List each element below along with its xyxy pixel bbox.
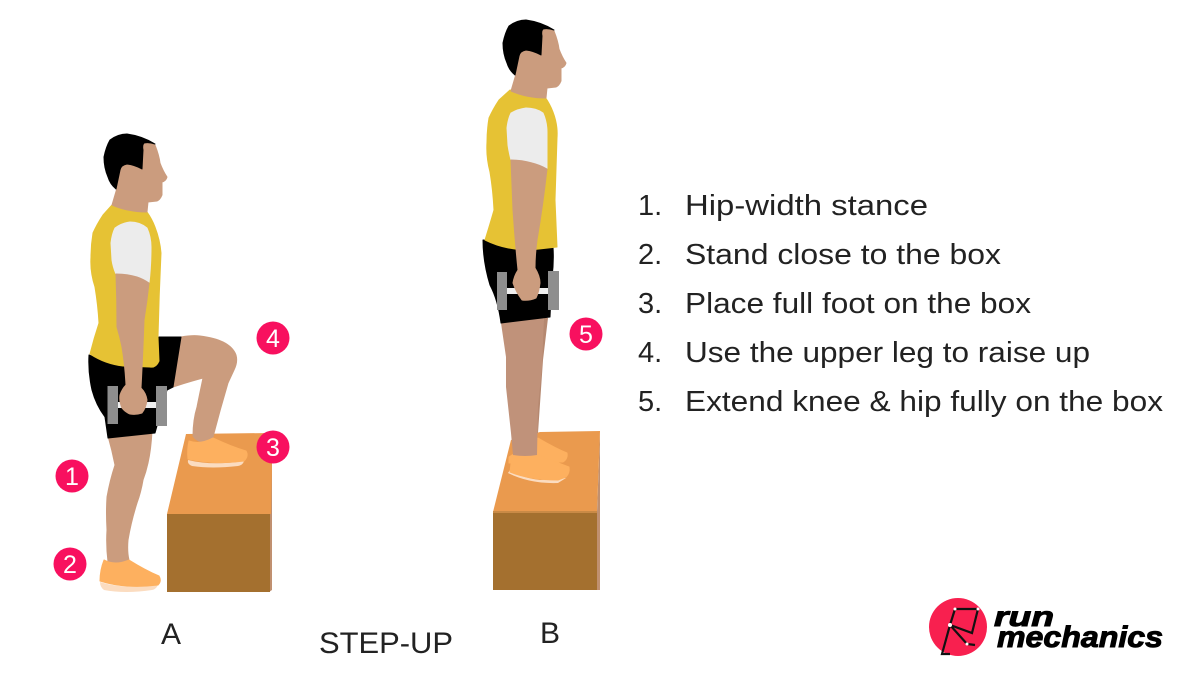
logo wordmark: mechanics [997,621,1163,654]
shorts B [483,240,553,323]
shoes B [508,438,569,483]
marker 1 [56,460,88,492]
shorts A [89,337,181,438]
step 2: 2. [638,239,662,271]
shirt B [485,90,557,250]
marker 1: 1 [65,463,79,491]
step 4: 4. [638,337,662,369]
head B [503,20,566,98]
step 4: Use the upper leg to raise up [685,337,1090,369]
sleeve A [111,222,151,283]
raised leg [173,336,237,442]
step 5: 5. [638,386,662,418]
shirt A [90,205,161,367]
arm B [511,160,547,300]
front leg B [501,317,544,456]
figure A: person stepping up onto box [89,134,272,592]
standing leg [106,431,152,564]
marker 4 [256,322,290,354]
marker 2: 2 [63,551,77,579]
step 3: 3. [638,288,662,320]
title: STEP-UP: STEP-UP [319,627,453,660]
dumbbell B [497,271,559,310]
box A [167,433,272,592]
marker 4: 4 [266,325,280,353]
marker 2 [54,548,86,580]
back leg B [530,317,548,433]
box B [493,431,600,590]
figure B: person standing on box [483,20,600,590]
step 2: Stand close to the box [685,239,1002,271]
logo: Run Mechanics [929,598,1163,656]
arm A [116,274,149,414]
instruction list [638,190,1164,418]
marker 5: 5 [579,321,593,349]
logo wordmark: run [994,601,1054,632]
dumbbell A [108,386,167,426]
head A [104,134,167,212]
logo circle with R [929,598,987,656]
marker 5 [570,318,602,350]
step 1: Hip-width stance [685,190,928,222]
marker 3 [256,430,290,464]
logo wordmark [994,601,1163,654]
step 5: Extend knee & hip fully on the box [685,386,1164,418]
step 3: Place full foot on the box [685,288,1032,320]
sleeve B [507,108,547,169]
step 1: 1. [638,190,662,222]
label B: B [540,617,560,650]
standing foot shoe [100,560,160,592]
label A: A [161,618,181,651]
marker 3: 3 [266,434,280,462]
raised foot shoe [188,438,247,468]
